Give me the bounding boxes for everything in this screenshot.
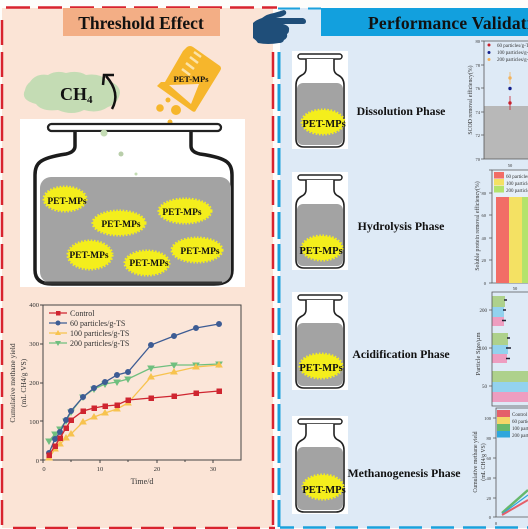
line chart: cumulative methane yield: Time/d [131,477,153,486]
chart: soluble protein removal efficiency: Soluble protein removal efficiency(%) [474,181,481,271]
line chart: cumulative methane yield: 0 [36,458,39,465]
line chart: cumulative methane yield: 30 [210,466,216,473]
particle cluster: PET-MPs [180,247,220,257]
line chart: cumulative methane yield: 400 [29,302,39,309]
series: 100 particles [46,362,222,460]
chart: SCOD removal efficiency: 72 [476,133,480,138]
chart: methanogenesis cumulative yield: 40 [486,476,492,481]
chart legend [49,309,129,348]
series: 60 particles [46,322,222,456]
line chart: cumulative methane yield: Cumulative methane yield [8,343,17,423]
series: 200 particles [46,362,222,444]
chart: SCOD removal efficiency: 70 [476,157,481,162]
chart: soluble protein removal efficiency: 80 [482,191,487,196]
chart: soluble protein removal efficiency: 50 [513,286,518,291]
line chart: cumulative methane yield: 300 [29,341,39,348]
chart: SCOD removal efficiency: 50 [508,163,513,168]
line chart: cumulative methane yield: 20 [154,466,160,473]
icon: beaker pouring particles [156,46,221,115]
jar: hydrolysis phase [292,172,348,270]
chart: particle size: Particle Size/μm [475,332,482,376]
chart: soluble protein removal efficiency: 40 [482,236,487,241]
chart: methanogenesis cumulative yield: 60 [486,456,492,461]
chart: SCOD removal efficiency: 76 [476,86,481,91]
chart: methanogenesis cumulative yield: Control [512,413,528,418]
label: acidification phase: Acidification Phase [352,347,450,361]
arrow: methane release [103,75,115,109]
panel: threshold effect [0,8,277,528]
heading: performance validation [321,8,528,36]
chart: methanogenesis cumulative yield: 20 [486,496,492,501]
jar: dissolution phase [292,51,348,149]
chart: particle size: 50 [482,385,488,390]
line chart: cumulative methane yield: 0 [42,466,46,473]
jar: acidification phase: PET-MPs [299,363,343,374]
label: hydrolysis phase: Hydrolysis Phase [358,219,444,233]
chart: soluble protein removal efficiency: 60 [482,213,487,218]
chart: SCOD removal efficiency: 78 [476,63,481,68]
chart: methanogenesis cumulative yield: (mL CH4/g VS) [480,443,487,481]
chart: soluble protein removal efficiency [474,170,528,291]
chart: SCOD removal efficiency: SCOD removal efficiency(%) [467,65,474,135]
line chart: cumulative methane yield: (mL CH4/g VS) [19,358,28,407]
chart: soluble protein removal efficiency: 20 [482,258,487,263]
line chart: cumulative methane yield [8,302,241,486]
chart: SCOD removal efficiency [467,39,528,168]
particle cluster: PET-MPs [162,208,202,218]
line chart: cumulative methane yield: 100 [29,419,39,426]
heading: threshold effect: Threshold Effect [78,13,204,33]
line chart: cumulative methane yield: 200 [29,380,39,387]
chart: particle size: 200 [480,309,488,314]
chart: particle size [475,292,528,406]
particle cluster: PET-MPs [69,251,109,261]
series: control [47,389,222,458]
jar illustration [20,119,245,287]
heading: threshold effect [63,8,220,36]
chart legend: Control [70,309,95,318]
chart legend: 100 particles/g-TS [70,329,129,338]
chart: methanogenesis cumulative yield: 100 [484,416,492,421]
icon: methane cloud [24,72,120,113]
icon: methane cloud: CH [60,84,87,104]
label: methanogenesis phase: Methanogenesis Phase [347,466,461,480]
chart legend: 200 particles/g-TS [70,339,129,348]
icon: methane cloud: 4 [87,94,93,106]
label: dissolution phase: Dissolution Phase [357,104,445,118]
icon: beaker pouring particles: PET-MPs [173,74,209,84]
jar: methanogenesis phase [292,416,348,514]
chart: methanogenesis cumulative yield: 0 [489,515,492,520]
line chart: cumulative methane yield: 10 [97,466,103,473]
particle cluster: PET-MPs [47,197,87,207]
panel: performance validation [278,8,528,528]
jar: methanogenesis phase: PET-MPs [302,485,346,496]
chart: particle size: 100 [480,347,488,352]
particle cluster: PET-MPs [101,220,141,230]
chart: methanogenesis cumulative yield [473,408,528,526]
chart: SCOD removal efficiency: 74 [476,110,481,115]
jar: acidification phase [292,292,348,390]
jar: dissolution phase: PET-MPs [302,119,346,130]
chart: methanogenesis cumulative yield: 80 [486,436,492,441]
particle cluster [44,187,222,275]
chart legend: 60 particles/g-TS [70,319,125,328]
chart: SCOD removal efficiency: 80 [476,39,481,44]
jar: hydrolysis phase: PET-MPs [299,246,343,257]
chart: soluble protein removal efficiency: 0 [484,281,487,286]
icon: pointing hand [253,10,306,44]
chart: methanogenesis cumulative yield: Cumulative methane yield [473,431,479,493]
chart: methanogenesis cumulative yield: 0 [495,521,498,526]
particle cluster: PET-MPs [129,259,169,269]
